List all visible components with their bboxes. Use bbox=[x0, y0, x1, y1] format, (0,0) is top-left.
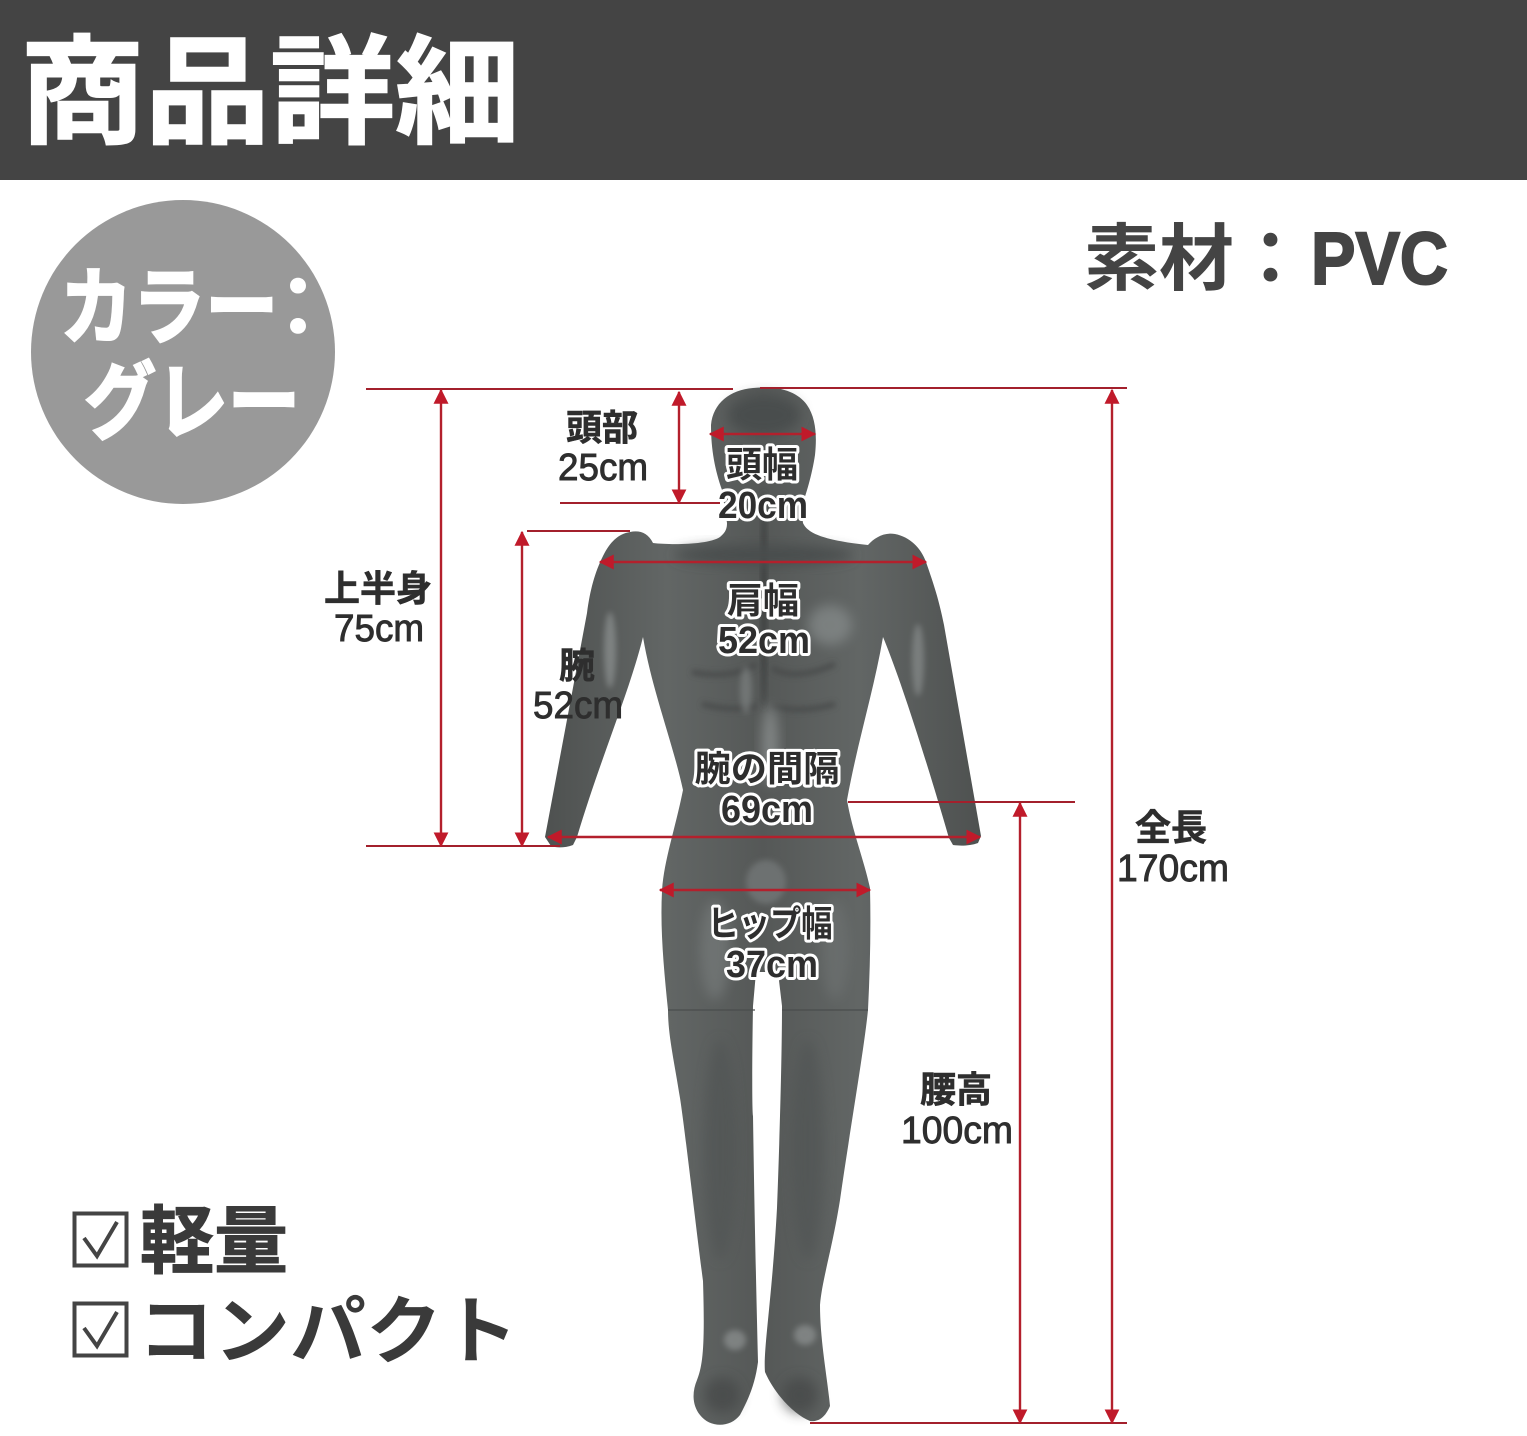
icon: checkbox bbox=[74, 1214, 126, 1266]
label: arm: 腕 bbox=[559, 645, 595, 686]
header band bbox=[0, 0, 1527, 180]
label: head height: 頭部 bbox=[566, 407, 638, 448]
mannequin shading bbox=[604, 395, 924, 1413]
label: hip width: 37cm bbox=[726, 944, 818, 986]
label: total length: 170cm bbox=[1117, 848, 1229, 890]
label: arm span: 腕の間隔 bbox=[694, 748, 840, 789]
label: shoulder width: 52cm bbox=[718, 620, 810, 662]
label: arm span: 69cm bbox=[721, 789, 813, 831]
color label line 1: ： bbox=[256, 261, 340, 355]
label: shoulder width: 肩幅 bbox=[727, 580, 799, 621]
label: head height: 25cm bbox=[558, 447, 648, 489]
label: head height bbox=[558, 407, 648, 489]
arrow: waist height bbox=[1019, 803, 1021, 1423]
arrow: shoulder width bbox=[600, 561, 926, 563]
arrow: head width bbox=[710, 433, 815, 435]
label: upper body bbox=[324, 568, 432, 650]
arrow: hip width bbox=[660, 889, 870, 891]
arrow: head height bbox=[678, 392, 680, 503]
label: head width: 頭幅 bbox=[726, 444, 798, 485]
label: hip width bbox=[708, 903, 832, 986]
mannequin bbox=[545, 387, 981, 1425]
label: upper body: 75cm bbox=[334, 608, 424, 650]
label: hip width: ヒップ幅 bbox=[708, 903, 832, 944]
measurement lines bbox=[366, 388, 1127, 1423]
icon: checkbox bbox=[74, 1304, 126, 1356]
label: arm: 52cm bbox=[533, 685, 623, 727]
label: head width: 20cm bbox=[718, 485, 808, 527]
label: waist height: 100cm bbox=[901, 1110, 1013, 1152]
color label line 1: カラー bbox=[60, 261, 278, 355]
material text: PVC bbox=[1311, 217, 1448, 300]
label: arm span bbox=[694, 748, 840, 831]
arrow: upper body height bbox=[440, 390, 442, 846]
title: 商品詳細 bbox=[20, 28, 520, 160]
material text: 素材 bbox=[1084, 219, 1234, 300]
label: head width bbox=[718, 444, 808, 527]
label: waist height: 腰高 bbox=[920, 1069, 992, 1110]
color badge bbox=[31, 200, 340, 504]
color label line 2: グレー bbox=[84, 356, 300, 450]
feature: lightweight bbox=[74, 1200, 288, 1283]
label: arm bbox=[533, 645, 623, 727]
label: upper body: 上半身 bbox=[324, 568, 432, 609]
feature: compact: コンパクト bbox=[138, 1290, 518, 1373]
label: total length: 全長 bbox=[1135, 807, 1207, 848]
label: shoulder width bbox=[718, 580, 810, 662]
label: total length bbox=[1117, 807, 1229, 890]
arrow: arm length bbox=[521, 532, 523, 846]
material text: ： bbox=[1234, 219, 1307, 300]
feature: lightweight: 軽量 bbox=[140, 1200, 288, 1283]
label: waist height bbox=[901, 1069, 1013, 1152]
arrow: arm span bbox=[548, 836, 980, 838]
arrow: total length bbox=[1111, 390, 1113, 1423]
material text bbox=[1084, 217, 1448, 300]
